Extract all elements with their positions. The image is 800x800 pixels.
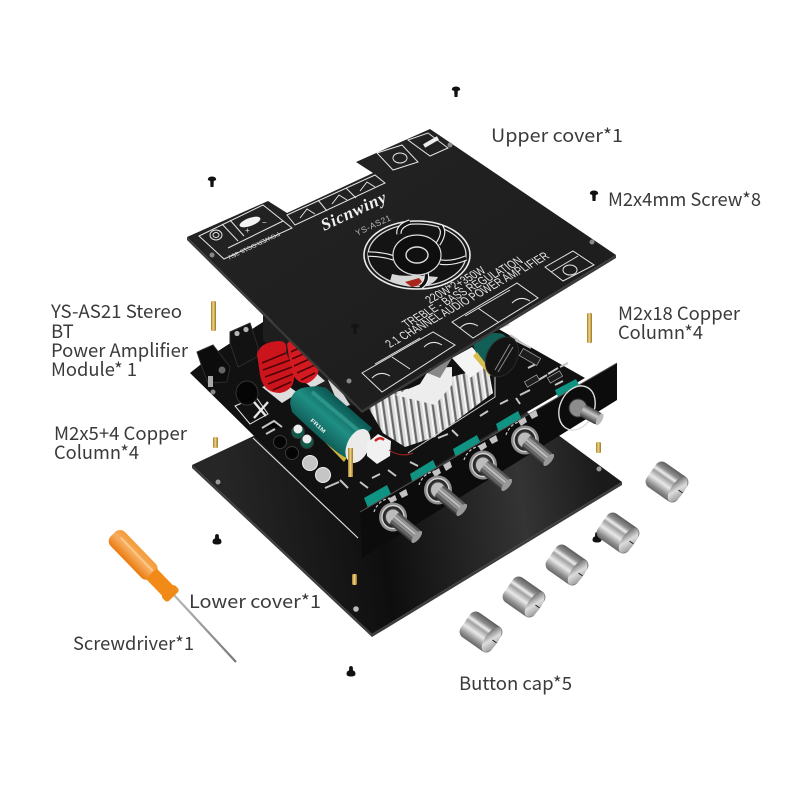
icon: button cap [643,459,692,505]
small capacitors and transistors [262,324,568,488]
potentiometer knob 2 [419,471,469,518]
small green capacitor [472,331,525,383]
screw through plate [351,324,359,334]
icon: screw [592,532,602,542]
potentiometer knob 1 [374,498,424,545]
power input label box: − [262,218,267,227]
subwoofer label box [362,332,455,392]
power input label box [199,205,292,260]
icon: button cap [543,542,592,588]
silver heatsink edge behind capacitor [328,378,350,408]
side wall behind board [263,314,365,408]
label: short copper column [54,420,188,465]
label: long copper column [618,300,741,345]
potentiometer knob 4 [506,421,556,468]
brand logo: Sicnwiny [318,188,390,235]
potentiometer knob 3 [464,446,514,493]
icon: screw [212,534,222,544]
icon: short copper column [596,442,601,453]
label: amplifier module: YS-AS21 Stereo [50,298,182,324]
label: amplifier module: Power Amplifier [51,337,189,363]
icon: long copper column [211,301,216,331]
label: screw: M2x4mm Screw*8 [608,186,761,212]
power rating text: 220W*2+350W [422,264,489,306]
treble and bass label box [452,283,538,338]
icon: screw [452,86,460,97]
icon: screw [208,176,216,187]
label: short copper column: Column*4 [54,439,139,465]
white connector with wires [367,434,413,464]
panel: front control panel [360,363,617,558]
power input label box: POWER:DC18-36V [225,231,281,260]
icon: screw [590,190,598,201]
channel description text: 2.1 CHANNEL AUDIO POWER AMPLIFIER [382,249,552,350]
tone regulation text: TREBLE - BASS REGULATION [399,254,526,330]
teal terminal blocks [364,379,579,508]
heatsink [368,347,495,453]
label: upper cover: Upper cover*1 [491,122,623,148]
speaker output label box [287,175,385,225]
volume ring [552,380,602,436]
icon: short copper column [352,574,357,585]
label: lower cover: Lower cover*1 [189,588,321,614]
label: amplifier module: BT [51,318,74,344]
brass standoff on board [348,448,353,477]
power jack [197,345,230,394]
label: long copper column: M2x18 Copper [618,300,741,326]
model number: YS-AS21 [354,213,393,238]
audio input label box [377,145,418,170]
icon: screwdriver [106,527,236,662]
large green capacitor: FR1M [309,418,327,435]
volume potentiometer knob [569,399,605,426]
switch label box [408,133,448,156]
chip cluster [519,349,563,387]
icon: screw [346,666,356,676]
screw terminal [230,323,258,367]
level marks [388,410,538,503]
panel: amplifier module circuit board [190,314,585,540]
panel: upper cover plate [187,129,616,413]
panel: lower cover plate [192,348,622,637]
fan grille [364,221,470,289]
large green capacitor [290,386,376,467]
master volume label box [545,251,594,281]
icon: long copper column [587,313,592,343]
circuit board base [190,322,585,540]
icon: button cap [594,510,643,556]
red inductor coils [257,336,325,403]
label: amplifier module [50,298,189,382]
label: long copper column: Column*4 [618,319,703,345]
label: short copper column: M2x5+4 Copper [54,420,188,446]
label: button cap: Button cap*5 [459,670,572,696]
icon: short copper column [213,437,218,448]
power input label box: + [245,226,250,235]
label: screwdriver: Screwdriver*1 [73,630,194,656]
toggle switch [235,381,268,424]
icon: button cap [457,609,506,655]
screw holes [210,142,594,384]
icon: button cap [500,574,549,620]
label: amplifier module: Module* 1 [51,356,137,382]
